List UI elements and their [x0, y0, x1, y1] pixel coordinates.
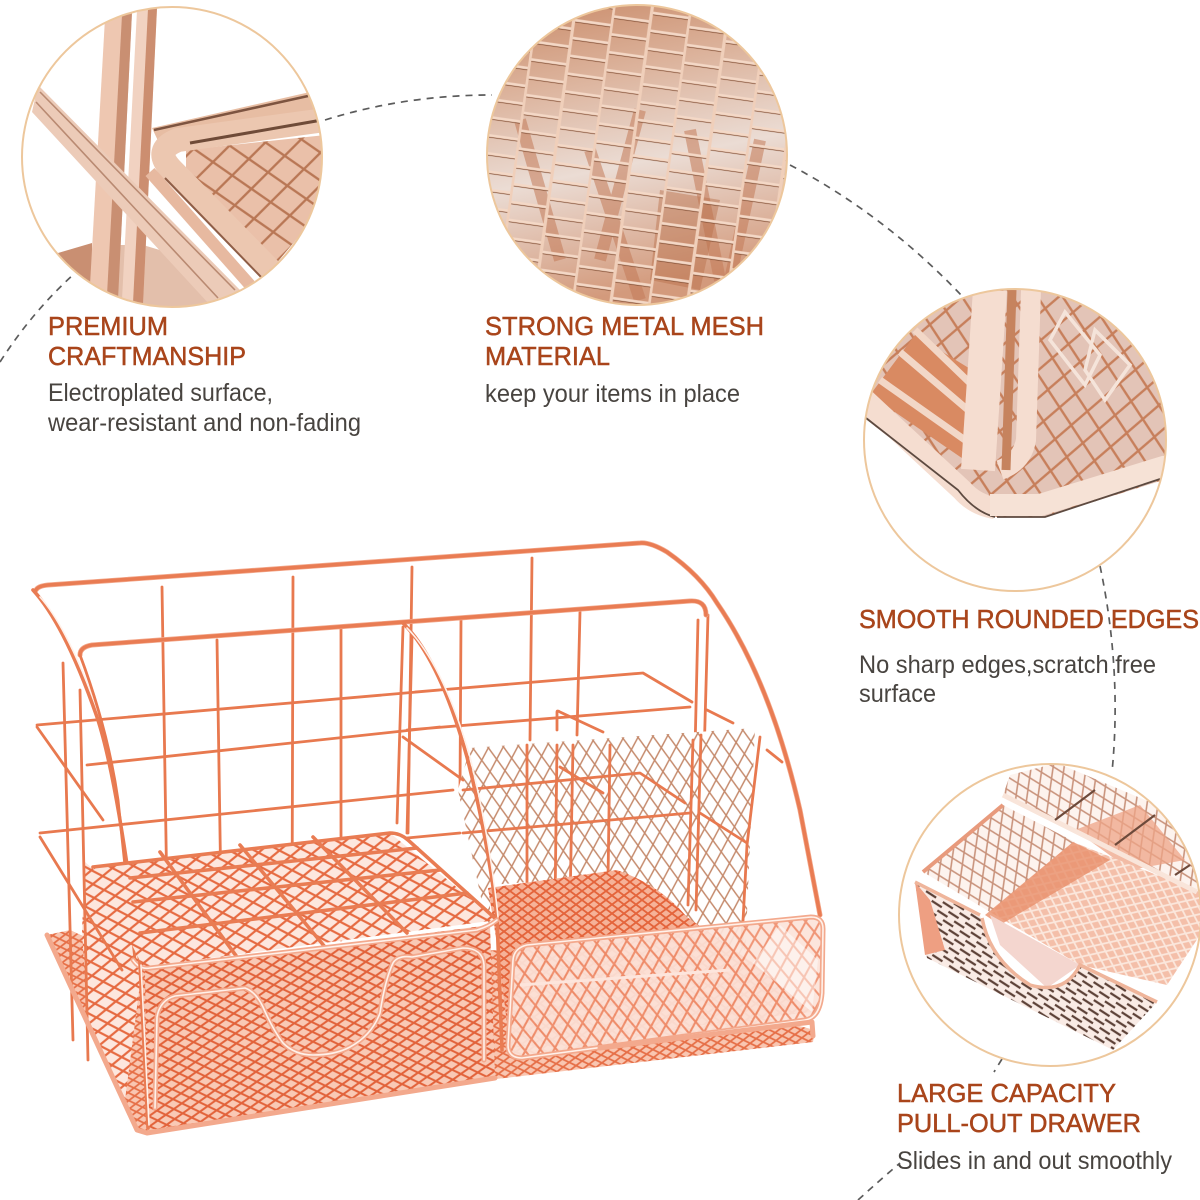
base tray mesh — [47, 930, 815, 1133]
body text: keep items in place: keep your items in place — [485, 380, 740, 408]
divider wires — [397, 623, 760, 1050]
heading line 2: material: MATERIAL — [485, 341, 610, 371]
body text: no sharp edges: No sharp edges,scratch free — [859, 651, 1156, 679]
front right tray mesh panel — [508, 917, 823, 1058]
top grid rails — [93, 833, 497, 957]
heading: smooth rounded edges: SMOOTH ROUNDED EDGES — [859, 604, 1199, 634]
heading: strong metal mesh: STRONG METAL MESH — [485, 311, 764, 341]
front left drawer rails — [47, 920, 497, 1133]
body text: electroplated surface: Electroplated surface, — [48, 379, 273, 407]
left side mesh panel — [82, 862, 142, 1100]
dashed connector: lower left exit — [0, 274, 74, 362]
body text: surface: surface — [859, 680, 936, 708]
detail circle: pull-out drawer — [895, 763, 1200, 1068]
detail circle: premium craftsmanship — [20, 5, 325, 310]
dashed connector: mesh circle to rounded edges circle — [790, 165, 962, 296]
back wire frame — [33, 543, 820, 1060]
dashed connector: top left circle to mesh circle — [325, 95, 492, 120]
heading line 2: premium craftsmanship: CRAFTMANSHIP — [48, 341, 246, 371]
pen cup inner wires — [403, 711, 747, 910]
heading: premium craftsmanship: PREMIUM — [48, 311, 168, 341]
dashed connector: rounded edges circle to drawer circle — [1100, 566, 1115, 772]
front left drawer mesh panel — [145, 925, 495, 1130]
dashed connector: below drawer circle — [994, 1059, 1002, 1072]
pen cup mesh — [458, 728, 755, 960]
body text: slides in and out: Slides in and out smoothly — [897, 1147, 1172, 1175]
right compartment floor — [488, 870, 812, 1048]
detail circle: rounded edges — [863, 288, 1170, 593]
product illustration: rose gold wire desk organizer — [33, 543, 823, 1133]
heading: large capacity: LARGE CAPACITY — [897, 1078, 1116, 1108]
sticky note organizer top grid — [93, 833, 497, 967]
dashed connector: bottom right exit — [858, 1163, 900, 1200]
detail circle: mesh material — [485, 3, 790, 308]
body text: wear-resistant: wear-resistant and non-fading — [47, 409, 361, 437]
front right tray rails — [508, 917, 823, 1058]
heading line 2: pull-out drawer: PULL-OUT DRAWER — [897, 1108, 1141, 1138]
